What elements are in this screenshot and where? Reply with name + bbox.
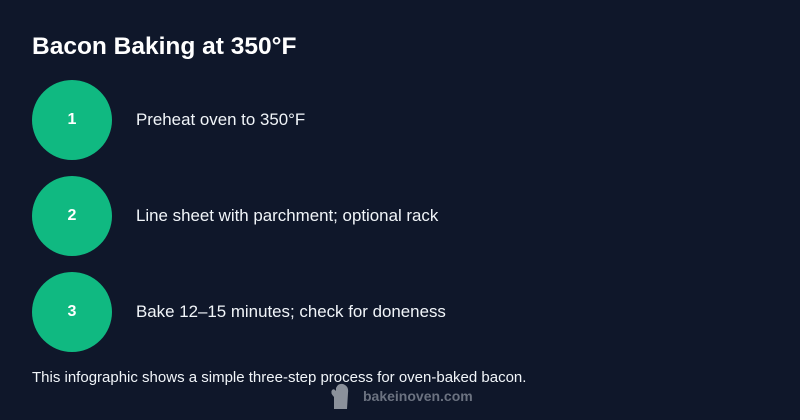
step 2 text: Line sheet with parchment; optional rack <box>136 206 438 225</box>
step 1 circle: 1 <box>68 111 76 128</box>
footer text: bakeinoven.com <box>363 388 473 404</box>
footer logo <box>331 384 473 409</box>
step 1 circle <box>32 80 112 160</box>
step 3 circle <box>32 272 112 352</box>
step 2 circle <box>32 176 112 256</box>
step 3 text: Bake 12–15 minutes; check for doneness <box>136 302 446 321</box>
title: Bacon Baking at 350°F <box>32 33 296 60</box>
step 2 circle: 2 <box>68 207 76 224</box>
step 1 text: Preheat oven to 350°F <box>136 110 305 129</box>
icon: oven mitt <box>331 384 348 409</box>
step 3 circle: 3 <box>68 303 76 320</box>
caption: This infographic shows a simple three-step process for oven-baked bacon. <box>32 369 526 386</box>
